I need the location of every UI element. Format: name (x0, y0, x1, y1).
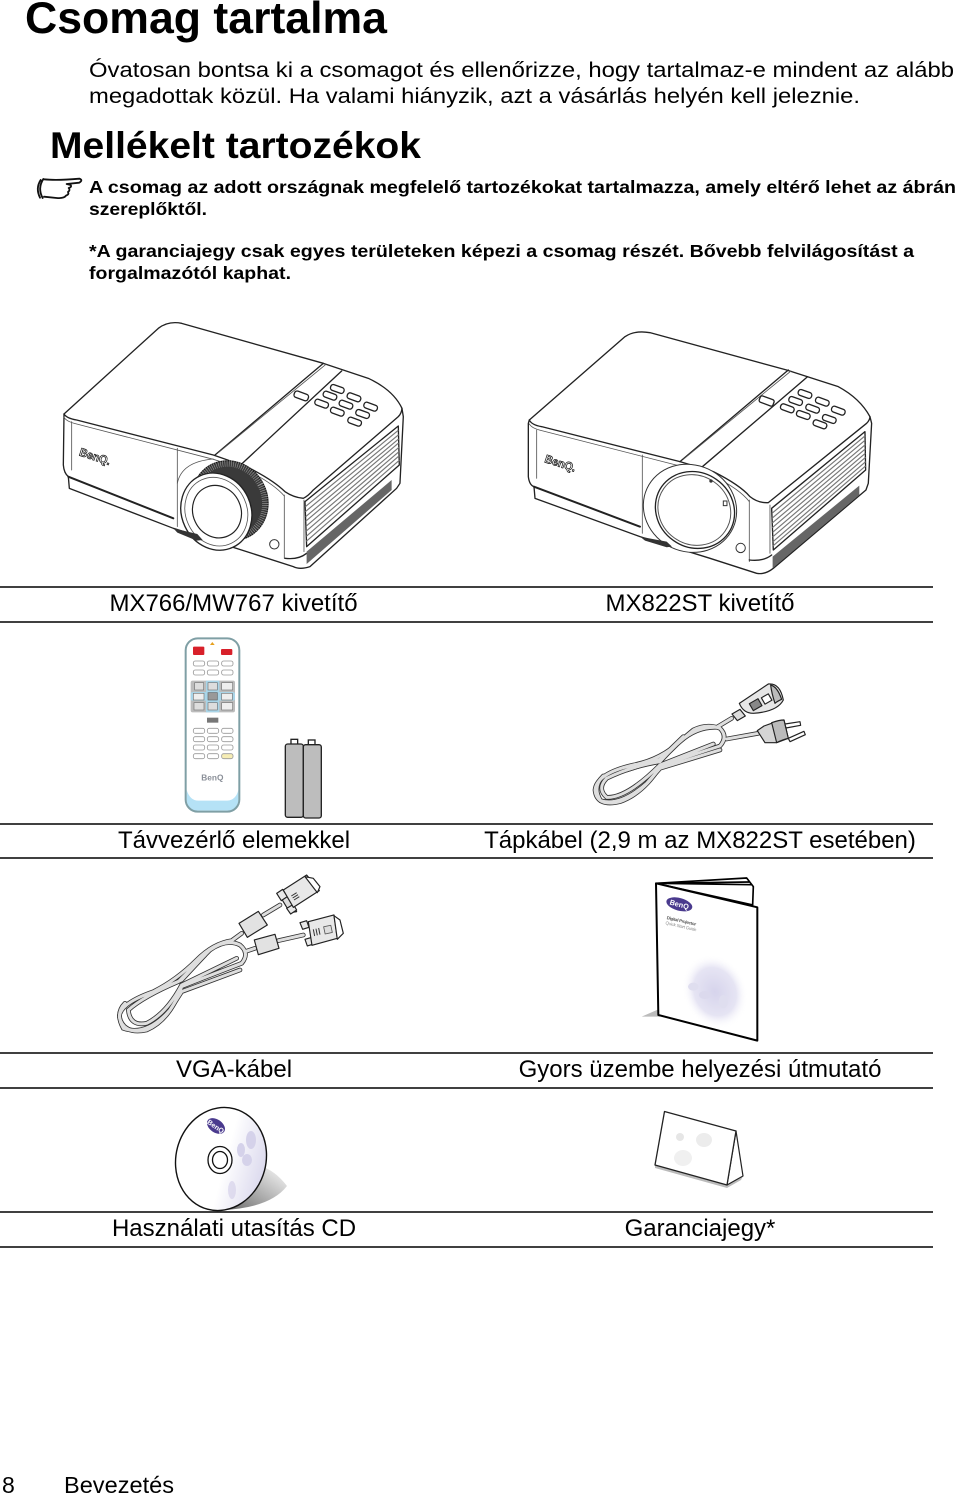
floor shadow (642, 1009, 660, 1017)
navigation pad (191, 681, 235, 712)
lens opening (629, 449, 751, 568)
caption: VGA cable: VGA-kábel (176, 1056, 292, 1083)
icon: pointing hand (38, 179, 81, 198)
illustration: MX766/MW767 projector (63, 323, 403, 568)
appliance connector (732, 684, 783, 721)
caption: projector MX766/MW767: MX766/MW767 kivetítő (109, 590, 358, 617)
lower buttons (193, 718, 233, 759)
cover motif (670, 944, 760, 1040)
top panel strip (215, 363, 342, 464)
brand logo: BenQ. (543, 453, 577, 475)
disc (164, 1097, 278, 1221)
illustration: MX822ST projector (528, 332, 872, 574)
illustration: user manual CD (164, 1097, 287, 1221)
cover page (656, 883, 757, 1041)
cover title: Digital Projector (666, 915, 697, 927)
ferrite beads (239, 911, 279, 955)
control buttons (759, 389, 846, 430)
side vent grille (772, 432, 866, 568)
intro text: megadottak közül. Ha valami hiányzik, azt a vásárlás helyén kell jeleznie. (89, 84, 860, 108)
heading: included accessories: Mellékelt tartozékok (50, 124, 421, 166)
power buttons (193, 642, 232, 655)
cover logo: BenQ (669, 898, 690, 911)
lens shift foot (640, 537, 672, 547)
disc hub (208, 1146, 232, 1174)
upper VGA connector (277, 875, 320, 914)
cover logo (665, 895, 694, 914)
side vent grille (305, 426, 399, 564)
note text: *A garanciajegy csak egyes területeken képezi a csomag részét. Bővebb felvilágosítást a (89, 241, 914, 261)
disc logo: BenQ (205, 1119, 225, 1136)
note text: szereplőktől. (89, 199, 207, 219)
illustration: batteries (285, 739, 321, 818)
intro text: Óvatosan bontsa ki a csomagot és ellenőrizze, hogy tartalmaz-e mindent az alább (89, 57, 954, 82)
caption: user manual CD: Használati utasítás CD (112, 1215, 356, 1242)
note text (89, 177, 956, 283)
caption: projector MX822ST: MX822ST kivetítő (606, 590, 794, 617)
caption: power cable: Tápkábel (2,9 m az MX822ST esetében) (484, 827, 916, 854)
disc shadow (222, 1165, 287, 1210)
mains plug (757, 720, 805, 743)
table rules (0, 587, 933, 1247)
upper buttons (193, 661, 233, 675)
illustration: remote control (186, 638, 239, 812)
back pages (656, 878, 753, 905)
caption: warranty card: Garanciajegy* (625, 1215, 775, 1242)
intro text (89, 57, 954, 108)
cover title (665, 915, 699, 932)
top panel strip (680, 370, 808, 467)
illustration: VGA cable (119, 875, 343, 1031)
lower VGA connector (300, 915, 343, 946)
cover title: Quick Start Guide (665, 920, 698, 932)
note text: A csomag az adott országnak megfelelő tartozékokat tartalmazza, amely eltérő lehet az ábrán (89, 177, 956, 197)
illustration: quick start guide (642, 878, 760, 1041)
control buttons (293, 384, 378, 427)
caption: remote with batteries: Távvezérlő elemekkel (118, 827, 350, 854)
brand logo: BenQ. (78, 447, 112, 468)
remote logo: BenQ (201, 773, 224, 783)
caption: quick start guide: Gyors üzembe helyezési útmutató (519, 1056, 881, 1083)
lens (168, 447, 282, 562)
illustration: warranty card (655, 1112, 743, 1188)
disc motif (228, 1131, 256, 1199)
lens shift foot (173, 528, 203, 541)
note text: forgalmazótól kaphat. (89, 263, 291, 283)
illustration: power cable (595, 684, 805, 803)
